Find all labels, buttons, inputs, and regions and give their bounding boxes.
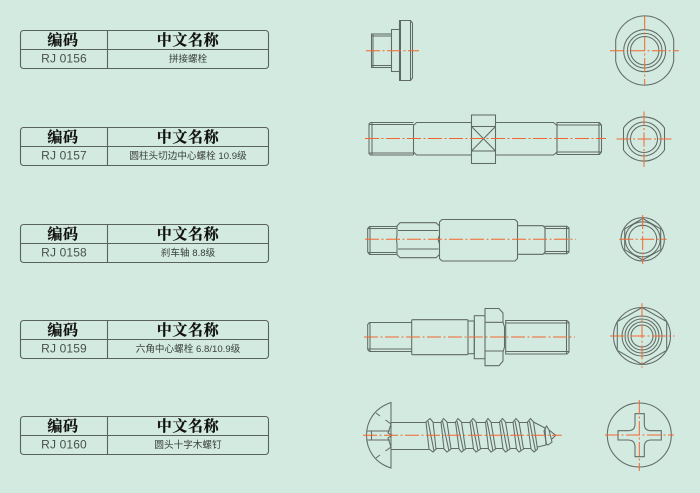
table: RJ 0157: 编码 — [47, 128, 79, 146]
drawing: RJ 0156 side view — [366, 20, 419, 80]
table: RJ 0156: 中文名称 — [157, 31, 220, 49]
drawing: RJ 0160 end view — [605, 400, 674, 471]
table: RJ 0159: 六角中心螺栓 6.8/10.9级 — [136, 343, 241, 355]
drawing: RJ 0160 side view — [363, 402, 562, 468]
drawing: RJ 0156 end view — [610, 16, 679, 85]
table: RJ 0160: 编码 — [47, 417, 79, 435]
table: RJ 0158: RJ 0158 — [41, 246, 87, 260]
drawing: RJ 0158 side view — [365, 220, 576, 261]
table: RJ 0158 — [20, 224, 268, 262]
table: RJ 0159: RJ 0159 — [41, 342, 87, 356]
drawing: RJ 0159 side view — [364, 308, 575, 366]
table: RJ 0157: 圆柱头切边中心螺栓 10.9级 — [129, 150, 247, 162]
table: RJ 0160: 圆头十字木螺钉 — [154, 439, 222, 451]
table: RJ 0156: RJ 0156 — [41, 52, 87, 66]
table: RJ 0157: RJ 0157 — [41, 148, 87, 162]
table: RJ 0156: 编码 — [47, 31, 79, 49]
table: RJ 0156: 拼接螺栓 — [169, 53, 208, 65]
drawing: RJ 0157 side view — [365, 115, 606, 164]
table: RJ 0157: 中文名称 — [157, 128, 220, 146]
table: RJ 0157 — [20, 128, 268, 166]
table: RJ 0158: 刹车轴 8.8级 — [161, 247, 216, 259]
drawing: RJ 0158 end view — [619, 215, 667, 264]
table: RJ 0158: 中文名称 — [157, 225, 220, 243]
drawing: RJ 0157 end view — [616, 112, 672, 167]
table: RJ 0159: 中文名称 — [157, 321, 220, 339]
drawing: RJ 0159 end view — [610, 303, 674, 368]
table: RJ 0159 — [20, 320, 268, 358]
table: RJ 0159: 编码 — [47, 321, 79, 339]
table: RJ 0160 — [20, 416, 268, 454]
table: RJ 0158: 编码 — [47, 225, 79, 243]
table: RJ 0160: RJ 0160 — [41, 438, 87, 452]
table: RJ 0160: 中文名称 — [157, 417, 220, 435]
table: RJ 0156 — [20, 30, 268, 68]
